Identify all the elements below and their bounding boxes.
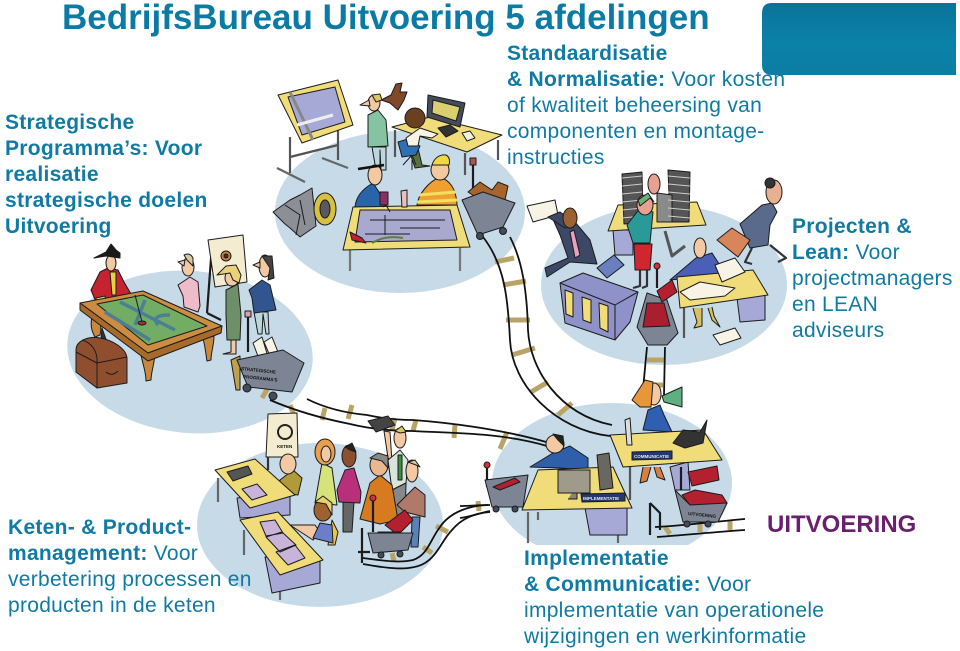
desk 2 xyxy=(240,512,323,600)
person: seated woman xyxy=(290,496,338,545)
text block: keten en productmanagement: Keten- & Product- xyxy=(8,516,191,539)
text block: implementatie en communicatie: wijzigingen en werkinformatie xyxy=(523,625,806,648)
person: blue jacket xyxy=(249,255,276,334)
person: tall man with tray xyxy=(368,416,408,522)
filing cabinet xyxy=(560,273,638,340)
person: pink shirt xyxy=(178,254,200,312)
left cart with red folder xyxy=(484,462,528,512)
person: orange coat xyxy=(360,453,398,524)
desk 1 xyxy=(215,459,295,518)
cart with red folder xyxy=(358,495,413,563)
person: man with glasses xyxy=(397,460,425,547)
desk implementatie: IMPLEMENTATIE xyxy=(583,496,619,501)
flipchart KETEN xyxy=(266,413,298,470)
person: man at desk xyxy=(670,238,768,345)
desk implementatie xyxy=(522,453,632,543)
text block: keten en productmanagement: verbetering processen en xyxy=(8,568,252,591)
flipchart xyxy=(207,235,247,320)
right cart UITVOERING xyxy=(650,466,727,535)
person: green suit xyxy=(217,265,241,354)
person: running man xyxy=(527,200,624,278)
backdrop ellipses xyxy=(60,131,787,607)
cart with scrolls xyxy=(231,311,304,400)
text block: implementatie en communicatie: Implementatie xyxy=(524,547,669,570)
right cart UITVOERING: UITVOERING xyxy=(688,511,717,519)
scene: strategische programma's xyxy=(76,235,304,400)
person: man at desk xyxy=(280,454,302,495)
text block: standaardisatie: Voor kosten xyxy=(665,68,785,91)
text block: standaardisatie: instructies xyxy=(507,146,605,169)
person: woman on phone xyxy=(627,193,654,288)
person: man leaning xyxy=(530,434,588,470)
person: blue with coffee xyxy=(355,165,388,209)
person: magenta jacket xyxy=(337,443,361,532)
person: walking woman with case xyxy=(717,178,786,264)
flipchart KETEN: KETEN xyxy=(277,444,292,449)
scene: standaardisatie xyxy=(273,80,515,271)
text block: standaardisatie: of kwaliteit beheersing van xyxy=(507,94,762,117)
text block: strategische programma's: realisatie xyxy=(5,163,99,186)
desk communicatie: COMMUNICATIE xyxy=(634,454,669,459)
cart with red folders xyxy=(637,263,678,345)
text block: strategische programma's: Programma’s: Voor xyxy=(5,137,202,160)
text block: strategische programma's: Strategische xyxy=(5,111,134,134)
desk with paper stacks xyxy=(608,170,706,256)
scene: projecten en lean xyxy=(527,170,786,345)
text block: keten en productmanagement: Voor xyxy=(148,542,198,565)
text block: keten en productmanagement: producten in de keten xyxy=(8,594,216,617)
work table with plan xyxy=(343,190,470,271)
person: woman in green dress xyxy=(315,439,337,505)
person: hi-vis worker xyxy=(417,155,457,205)
person: woman with megaphone xyxy=(632,380,682,483)
drafting board xyxy=(277,80,353,182)
label: UITVOERING: UITVOERING xyxy=(767,511,916,538)
text block: implementatie en communicatie: Voor xyxy=(701,573,751,596)
text block: projecten en lean: en LEAN xyxy=(792,293,878,316)
rail tracks xyxy=(262,237,745,568)
treasure chest xyxy=(76,338,127,388)
text block: standaardisatie: componenten en montage- xyxy=(507,120,764,143)
text block: projecten en lean: Lean: xyxy=(792,241,849,264)
text block: strategische programma's: strategische doelen xyxy=(5,189,208,212)
pile of components xyxy=(273,188,336,237)
text block: standaardisatie: Standaardisatie xyxy=(507,42,668,65)
logo panel xyxy=(762,3,956,75)
person: green shirt with branch xyxy=(360,83,407,170)
desk communicatie xyxy=(610,418,722,500)
cart with scrolls: STRATEGISCHE xyxy=(241,366,276,375)
text block: projecten en lean: Voor xyxy=(849,241,900,264)
scene: keten en productmanagement xyxy=(215,413,425,600)
text block: standaardisatie: & Normalisatie: xyxy=(507,68,665,91)
text block: keten en productmanagement: management: xyxy=(8,542,148,565)
cart with scrolls: PROGRAMMA'S xyxy=(243,374,278,383)
desk with computer user xyxy=(392,95,502,175)
text block: implementatie en communicatie: & Communicatie: xyxy=(524,573,701,596)
text block: implementatie en communicatie: implementatie van operationele xyxy=(524,599,824,622)
person: pirate xyxy=(91,244,131,305)
text block: projecten en lean: Projecten & xyxy=(792,215,912,238)
text block: projecten en lean: projectmanagers xyxy=(792,267,953,290)
cart with tools xyxy=(462,158,515,240)
war table with map xyxy=(80,291,222,381)
text block: projecten en lean: adviseurs xyxy=(792,319,884,342)
text block: strategische programma's: Uitvoering xyxy=(5,215,112,238)
scene: implementatie en communicatie xyxy=(484,380,727,543)
